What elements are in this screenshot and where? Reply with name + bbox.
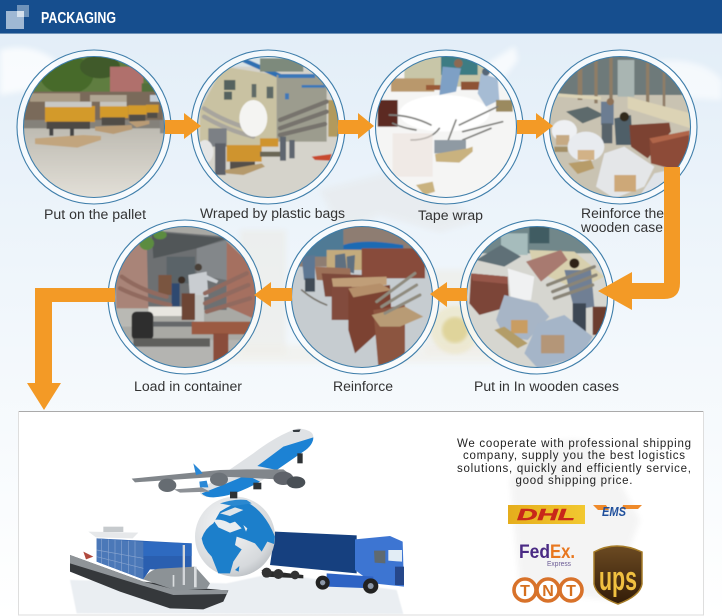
caption: wrapped by plastic bags: Wraped by plastic bags bbox=[200, 206, 345, 221]
caption: reinforce the wooden case bbox=[580, 206, 664, 235]
watermark medal bbox=[431, 306, 479, 354]
logo: TNT bbox=[514, 579, 582, 601]
caption: tape wrap: Tape wrap bbox=[418, 208, 483, 223]
arrow: step 1 to 2 bbox=[165, 113, 201, 139]
logo: TNT: T bbox=[566, 583, 576, 600]
step 4: reinforce the wooden case bbox=[543, 50, 697, 204]
logo: DHL: DHL bbox=[517, 507, 575, 524]
logo: FedEx bbox=[519, 542, 575, 568]
logo: UPS: ups bbox=[599, 560, 637, 598]
arrow: step 4 to 5 bbox=[598, 167, 680, 310]
shipping text: We cooperate with professional shipping bbox=[457, 438, 691, 450]
step 3: tape wrap bbox=[369, 50, 523, 204]
step 7: load in container bbox=[108, 220, 262, 374]
caption: put in wooden cases: Put in In wooden cases bbox=[474, 379, 619, 394]
header band bbox=[0, 0, 722, 34]
caption: load in container: Load in container bbox=[134, 379, 243, 394]
shipping text: good shipping price. bbox=[516, 475, 632, 487]
step 6: reinforce bbox=[285, 220, 439, 374]
heading: PACKAGING bbox=[41, 10, 116, 27]
shipping text bbox=[457, 438, 691, 487]
header icon: stacked squares bbox=[6, 5, 29, 29]
arrow: step 6 to 7 bbox=[254, 282, 292, 307]
watermark background shapes bbox=[0, 46, 722, 363]
caption: reinforce: Reinforce bbox=[333, 379, 393, 394]
logo: UPS bbox=[594, 546, 642, 604]
logo: FedEx: Express bbox=[547, 561, 571, 568]
caption: reinforce the wooden case: wooden case bbox=[580, 220, 663, 235]
illustration: ship bbox=[70, 527, 228, 609]
step 2: wrapped by plastic bags bbox=[191, 50, 345, 204]
illustration: globe bbox=[195, 497, 275, 577]
shipping text: company, supply you the best logistics bbox=[463, 450, 685, 462]
logo: DHL bbox=[508, 505, 585, 524]
logo: EMS: EMS bbox=[602, 505, 627, 519]
step 1: put on the pallet bbox=[17, 50, 171, 204]
step captions bbox=[44, 206, 664, 394]
logo: TNT: T bbox=[520, 583, 530, 600]
illustration: reflection bbox=[70, 573, 403, 614]
shipping text: solutions, quickly and efficiently service, bbox=[457, 463, 691, 475]
arrow: step 5 to 6 bbox=[430, 282, 467, 307]
logo: TNT: N bbox=[542, 583, 554, 600]
illustration: truck bbox=[262, 532, 404, 594]
logo: EMS bbox=[593, 505, 642, 519]
caption: put on the pallet: Put on the pallet bbox=[44, 207, 146, 222]
panel: shipping bbox=[18, 411, 704, 615]
logo: FedEx: Ex. bbox=[550, 542, 575, 563]
illustration: airplane bbox=[132, 428, 313, 498]
caption: reinforce the wooden case: Reinforce the bbox=[581, 206, 664, 221]
arrow: step 2 to 3 bbox=[338, 113, 374, 139]
arrow: step 3 to 4 bbox=[517, 113, 553, 139]
logo: FedEx: Fed bbox=[519, 542, 550, 563]
step 5: put in wooden cases bbox=[460, 220, 614, 374]
panel watermark bbox=[510, 440, 640, 600]
arrow: step 7 to shipping panel bbox=[27, 288, 115, 410]
